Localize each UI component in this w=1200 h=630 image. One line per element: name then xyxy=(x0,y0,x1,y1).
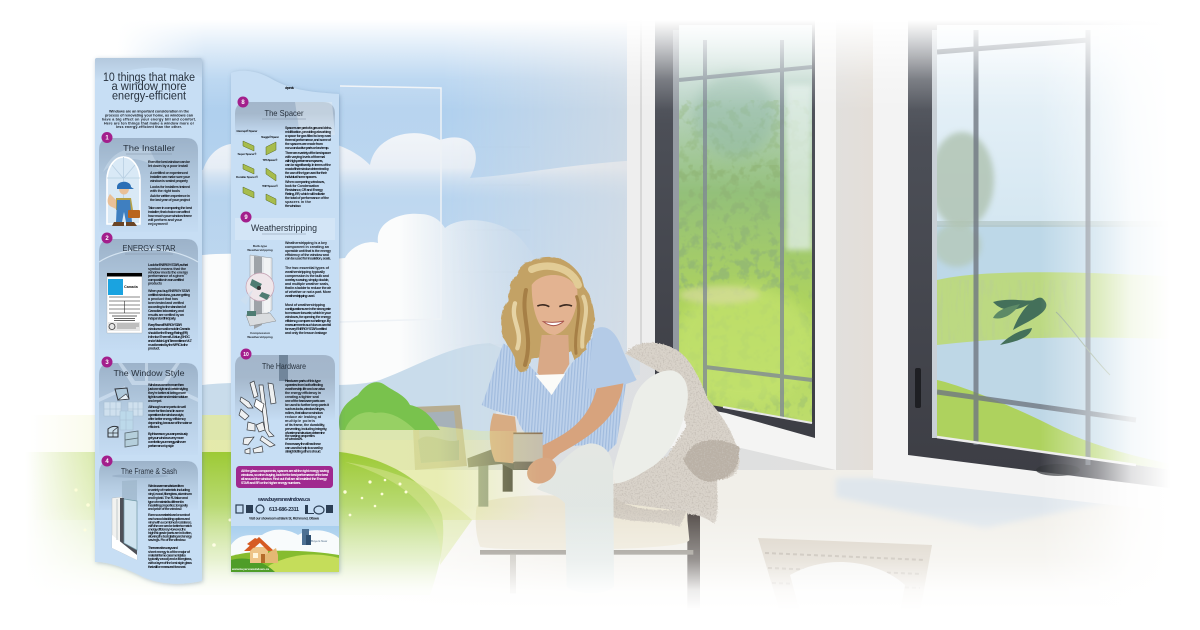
text: typically wood) and a fiberglass, xyxy=(148,557,192,561)
callout: purple summary box: STAR and ER or the higher energy numbers. xyxy=(241,481,301,485)
text: By this reason, you can previously xyxy=(148,432,189,436)
text: how much your window frame xyxy=(148,214,192,218)
wall picture outline xyxy=(340,86,441,322)
text: and only the lesson leakage xyxy=(285,331,327,335)
badge 4: 4 xyxy=(105,459,109,465)
plant leaves xyxy=(993,298,1110,375)
text: A certified or experienced xyxy=(150,171,189,175)
text: the window. xyxy=(285,204,301,208)
text: should be the Energy Rating (ER) xyxy=(148,331,189,335)
window style diagrams xyxy=(104,388,143,447)
icon: arched window with installer xyxy=(107,157,140,226)
text: installer can make sure your xyxy=(150,175,191,179)
heading: The Installer xyxy=(123,143,175,153)
text: the energy efficiency in xyxy=(285,391,322,395)
white edge on the far right xyxy=(1170,0,1200,630)
text: vinyl with a combined resistance. xyxy=(148,520,192,524)
section 3: the window style xyxy=(99,356,198,455)
forearm xyxy=(528,383,623,470)
text: efficiency, compare a challenge. By xyxy=(285,319,332,323)
house xyxy=(244,537,278,563)
text: Most of weatherstripping xyxy=(285,303,325,307)
hardware parts illustration xyxy=(239,381,276,454)
diagram labels and window section: Compression xyxy=(250,331,270,335)
text: certified windows, you are getting xyxy=(148,293,190,297)
text: to measure low-rate, which in your xyxy=(285,311,332,315)
text: weatherstrip life and can also xyxy=(284,387,326,391)
badge 10: 10 xyxy=(243,352,249,358)
spacer samples: TPS Spacer® xyxy=(262,158,278,162)
text: independent third party. xyxy=(148,316,177,320)
text: Weatherstripping is a key xyxy=(285,241,328,245)
heading: ENERGY STAR xyxy=(122,243,176,253)
floor xyxy=(300,470,1200,630)
diagram labels and window section: Bulb-type xyxy=(253,244,267,248)
hair mass xyxy=(501,257,595,371)
text: depending, because of the solar or xyxy=(148,421,193,425)
intro text: Windows are an important consideration in the xyxy=(109,110,189,114)
intro text xyxy=(102,110,196,129)
basket on the floor xyxy=(758,538,932,612)
text: When comparing windows, xyxy=(285,180,325,184)
section 9: weatherstripping xyxy=(235,212,335,339)
text: symbol means that the xyxy=(148,267,186,271)
carry-over word: depends xyxy=(285,86,294,90)
white fade along the right xyxy=(1040,0,1170,630)
panel background xyxy=(95,58,202,584)
text: and a Visible Light Transmittance VLT xyxy=(148,339,193,343)
text: look for Condensation xyxy=(285,184,320,188)
window one grilles xyxy=(679,40,812,418)
text: There are a few ways and xyxy=(148,546,179,550)
text: Resistance, CR and Energy xyxy=(285,188,324,192)
text xyxy=(284,126,333,208)
badge 2: 2 xyxy=(105,236,109,242)
sparkles xyxy=(74,479,408,547)
green hill xyxy=(25,452,443,595)
spacer samples: Super Spacer® xyxy=(238,152,257,156)
contact block xyxy=(236,497,333,520)
text: just one style and certain styling xyxy=(147,387,188,391)
text: can used to help to a seal by xyxy=(285,446,324,450)
text: a variety of materials including xyxy=(148,488,190,492)
section 1: the installer xyxy=(99,132,198,232)
text: Rating, ER, which will indicate xyxy=(285,192,325,196)
text: window meets the energy xyxy=(147,270,189,274)
text xyxy=(284,379,330,454)
text: Spacers are part of a gas and dehu- xyxy=(285,126,333,130)
text: and repel. xyxy=(148,399,162,403)
text: thermal performance, and some of xyxy=(285,138,332,142)
text: type of material is different in xyxy=(148,500,185,504)
text xyxy=(147,383,193,448)
energy label: Canada xyxy=(124,285,139,289)
text: the use of the type used for their xyxy=(285,171,328,175)
badge 8: 8 xyxy=(241,100,245,106)
left arm and hand xyxy=(490,413,517,463)
text: let down by a poor install xyxy=(148,164,188,168)
spacer samples: Intercept® Spacer xyxy=(236,129,258,133)
text: operations for windows style, xyxy=(148,413,184,417)
text: individual home spacers. xyxy=(285,175,317,179)
spacer samples: Swiggle® Spacer xyxy=(261,135,280,139)
garden view xyxy=(675,25,815,425)
text: compression is the bulb and xyxy=(285,274,330,278)
icon row right xyxy=(305,505,333,514)
text: windows, for opening the energy xyxy=(284,315,332,319)
heading: The Frame & Sash xyxy=(121,466,177,476)
wall xyxy=(60,0,1200,470)
illustrated sky and clouds xyxy=(142,29,640,440)
front leg xyxy=(537,443,614,593)
white fade on the far left xyxy=(60,0,205,630)
upper cloud xyxy=(202,133,627,190)
text: creating a tighter seal xyxy=(285,395,319,399)
window handle xyxy=(915,368,921,408)
raised leg xyxy=(613,370,688,483)
text: of water and structure, determine xyxy=(285,431,325,435)
text: efficiency of the window and xyxy=(285,253,330,257)
panel: left infographic strip xyxy=(95,58,202,584)
text: energy efficiency. However, the xyxy=(148,528,186,532)
window one xyxy=(655,20,836,470)
text: with high-performance spacers, xyxy=(284,159,323,163)
text: comfort to your energy, with ever xyxy=(148,440,187,444)
section 10: the hardware xyxy=(235,348,335,454)
text: configurations are in the strong rate xyxy=(285,307,331,311)
text: of whether or not a part. More xyxy=(285,290,331,294)
text: been tested and verified xyxy=(148,301,185,305)
text: product. xyxy=(148,346,160,350)
text: weatherstripping used. xyxy=(284,294,315,298)
text: component in creating an xyxy=(285,245,330,249)
right hand xyxy=(522,453,561,489)
callout: purple summary box xyxy=(236,466,333,488)
text: insulating properties; longevity xyxy=(148,504,189,508)
section 8: the spacer xyxy=(235,96,335,208)
wall trim xyxy=(627,20,655,355)
main title: 10 things that make xyxy=(103,70,195,84)
chair legs and right arm xyxy=(480,453,701,613)
panel: right infographic strip xyxy=(231,71,339,572)
text: products xyxy=(148,282,162,286)
text: a space for gas filled to keep seal xyxy=(285,134,331,138)
coffee mug xyxy=(513,433,543,469)
blouse xyxy=(482,327,637,453)
text: Ask for written experience in xyxy=(150,194,191,198)
text: Canadian laboratory, and xyxy=(148,309,185,313)
intro text: less energy-efficient than the other. xyxy=(116,125,182,129)
section 4: the frame and sash xyxy=(99,456,198,569)
footer landscape with house xyxy=(231,526,339,572)
text: midification, providing absorbing xyxy=(285,130,331,134)
heading: The Spacer xyxy=(264,108,304,118)
text: and price of the window. xyxy=(148,507,182,511)
text: Hardware parts of this type xyxy=(285,379,321,383)
text: for every ENERGY STAR certified xyxy=(285,327,328,331)
distant hill xyxy=(202,343,498,440)
badge 1: 1 xyxy=(105,136,109,142)
contact block: Visit our showroom at Bank St, Richmond, Ottawa xyxy=(249,516,319,520)
text: reduce air leaking at xyxy=(285,415,322,419)
text: according to the standard of xyxy=(148,305,187,309)
spacer samples: Duralite Spacer® xyxy=(236,175,259,179)
bush xyxy=(339,382,440,430)
badge 3: 3 xyxy=(105,360,109,366)
white fade along the bottom xyxy=(0,505,1200,630)
text: measurements such low as can fall xyxy=(285,323,331,327)
hair highlights xyxy=(514,266,586,365)
text: and hybrid. The R-Value and xyxy=(148,496,189,500)
callout: purple summary box: All the glass components, spacers are all the right energy saving xyxy=(241,469,329,473)
text xyxy=(147,263,193,350)
text: vinyl, wood, fiberglass, aluminum xyxy=(148,492,193,496)
text: can be used for insulation, seals. xyxy=(285,256,331,260)
text: efficient. xyxy=(148,425,160,429)
intro text: have a big effect on your energy bill and comfort. xyxy=(102,118,196,122)
diagram labels and window section: Weatherstripping xyxy=(247,248,273,252)
text: rollers, that allow a window xyxy=(285,411,323,415)
text xyxy=(147,484,193,569)
text: Every Race of ENERGY STAR xyxy=(148,323,182,327)
text: non-conductive parts or low temp. xyxy=(285,146,329,150)
text: sheet energy is of the major of xyxy=(148,550,191,554)
text: multiple points xyxy=(285,419,315,423)
seat cushion xyxy=(476,495,689,550)
text: each wood cladding options and xyxy=(148,517,191,521)
text: more for fixed and in some xyxy=(148,409,184,413)
logo: Buyers New xyxy=(311,539,328,543)
text: they're better at being more xyxy=(148,391,186,395)
text: installer; that choice can affect xyxy=(148,210,191,214)
text: with the right tools xyxy=(149,189,180,193)
text: that will be measured for a seal. xyxy=(148,565,186,569)
text: the sealing properties xyxy=(285,434,315,438)
callout: purple summary box: all around the window. Find out if all are all installed the Energy xyxy=(241,477,327,481)
person on chair (woman holding mug) xyxy=(467,257,739,613)
main title: a window more xyxy=(112,79,187,93)
heading: Weatherstripping xyxy=(251,222,317,233)
text: operates from both affecting xyxy=(285,383,323,387)
icon row left xyxy=(236,505,264,513)
footer url: www.buyersnewindows.ca xyxy=(231,567,269,571)
pale ground band xyxy=(30,415,540,520)
text: with a layer of the best style glass xyxy=(147,561,192,565)
text: such as locks, window hinges, xyxy=(285,407,325,411)
panel background xyxy=(231,71,339,572)
text: and multiple weather seals, xyxy=(285,282,329,286)
text: that in a ladder to reduce the air xyxy=(285,286,332,290)
text: be used to further keep parts it xyxy=(285,403,330,407)
heading: The Hardware xyxy=(262,361,306,371)
text: offer better energy efficiency xyxy=(148,417,187,421)
text: windows must be sold in Canada xyxy=(147,327,191,331)
room photo backdrop xyxy=(136,24,1160,602)
text: preventing, including integrity, xyxy=(285,427,328,431)
lake view xyxy=(937,25,1157,468)
text: allowing the best glazing and energy xyxy=(148,534,193,538)
white fade along the top xyxy=(0,0,1200,110)
diagram labels and window section xyxy=(240,244,276,339)
text: with varying levels of thermal xyxy=(284,155,325,159)
text xyxy=(284,241,332,335)
text: performance of a given xyxy=(148,274,185,278)
text: must be rated by the NFRC to the xyxy=(148,343,188,347)
text: results are verified by an xyxy=(148,313,185,317)
text: weatherstripping typically xyxy=(284,270,326,274)
diagram labels and window section: Weatherstripping xyxy=(247,335,273,339)
window two grilles xyxy=(937,30,1136,465)
text: of windows. xyxy=(285,437,303,441)
text: enjoyment! xyxy=(148,222,168,226)
framed picture on table xyxy=(412,405,467,470)
heading: The Window Style xyxy=(114,368,185,378)
spacer samples xyxy=(236,129,280,205)
text: one of the hardware parts can xyxy=(285,399,326,403)
neckline and undershirt xyxy=(535,335,569,395)
text: When you buy ENERGY STAR xyxy=(148,289,190,293)
text xyxy=(147,160,193,226)
intro text: Here are ten things that make a window more or xyxy=(104,122,195,126)
text: the last year of your project xyxy=(150,198,191,202)
chair left arm xyxy=(467,449,540,507)
illustrated lawn and bush overlay xyxy=(25,382,540,595)
text: Take care in comparing the best xyxy=(148,206,193,210)
main title: energy-efficient xyxy=(112,88,187,102)
window two xyxy=(873,25,1158,503)
intro text: process of renovating your home, as windows can xyxy=(105,114,194,118)
text: material frame casement (also xyxy=(148,554,187,558)
text: in the low Thermal U-Value, (SHGC xyxy=(148,335,190,339)
text: of its frame, the durability, xyxy=(285,423,325,427)
text: The two essential types of xyxy=(285,266,330,270)
callout: purple summary box: windows, so when buying, look for the best performance of the best xyxy=(240,473,329,477)
text: Windows are manufactured from xyxy=(148,484,185,488)
text: Look for ENERGY STAR, as that xyxy=(148,263,189,267)
text: Windows come in more than xyxy=(148,383,185,387)
text: straight letting others shoud. xyxy=(285,450,321,454)
blanket xyxy=(612,343,739,523)
text: window is sealed properly xyxy=(149,179,189,183)
main title xyxy=(103,70,195,102)
text: a product that has xyxy=(148,297,178,301)
contact block: 613-686-2311 xyxy=(269,507,299,513)
text: Looks for installers trained xyxy=(150,185,191,189)
spacer samples: TDP Spacer® xyxy=(262,184,279,188)
text: If necessary the all has these xyxy=(285,442,321,446)
text: composition in non-certified xyxy=(148,278,185,282)
text: Although some parts do well xyxy=(148,405,186,409)
text: Even so a material can be a mix of xyxy=(148,513,191,517)
text: the total of performance of the xyxy=(285,196,329,200)
text: spacers in the xyxy=(285,200,311,204)
lower cloud xyxy=(202,214,516,385)
text: There are a variety of the best spacer xyxy=(285,151,332,155)
text: Even the best window can be xyxy=(148,160,190,164)
text: most of their window determined by xyxy=(285,167,330,171)
text: overlay a casing, simply, double, xyxy=(285,278,329,282)
text: performance by style xyxy=(148,444,174,448)
face xyxy=(532,275,577,335)
text: savings. Fix of the window. xyxy=(148,538,186,542)
badge 9: 9 xyxy=(244,215,248,221)
section 2: energy star xyxy=(99,232,198,350)
text: highest grade parts are in it often, xyxy=(148,531,192,535)
text: operable unit that is the energy xyxy=(285,249,332,253)
text: can be significantly. In terms of the xyxy=(285,163,331,167)
text: get your windows very more xyxy=(148,436,184,440)
crank xyxy=(1036,464,1080,476)
text: with the one can be better to match xyxy=(147,524,193,528)
window frame cutaway xyxy=(112,480,137,560)
contact block: www.buyersnewindows.ca xyxy=(257,497,310,503)
text: tight to water and resist moisture xyxy=(148,395,188,399)
text: will perform and your xyxy=(147,218,183,222)
text: the spacers are made from xyxy=(285,142,324,146)
